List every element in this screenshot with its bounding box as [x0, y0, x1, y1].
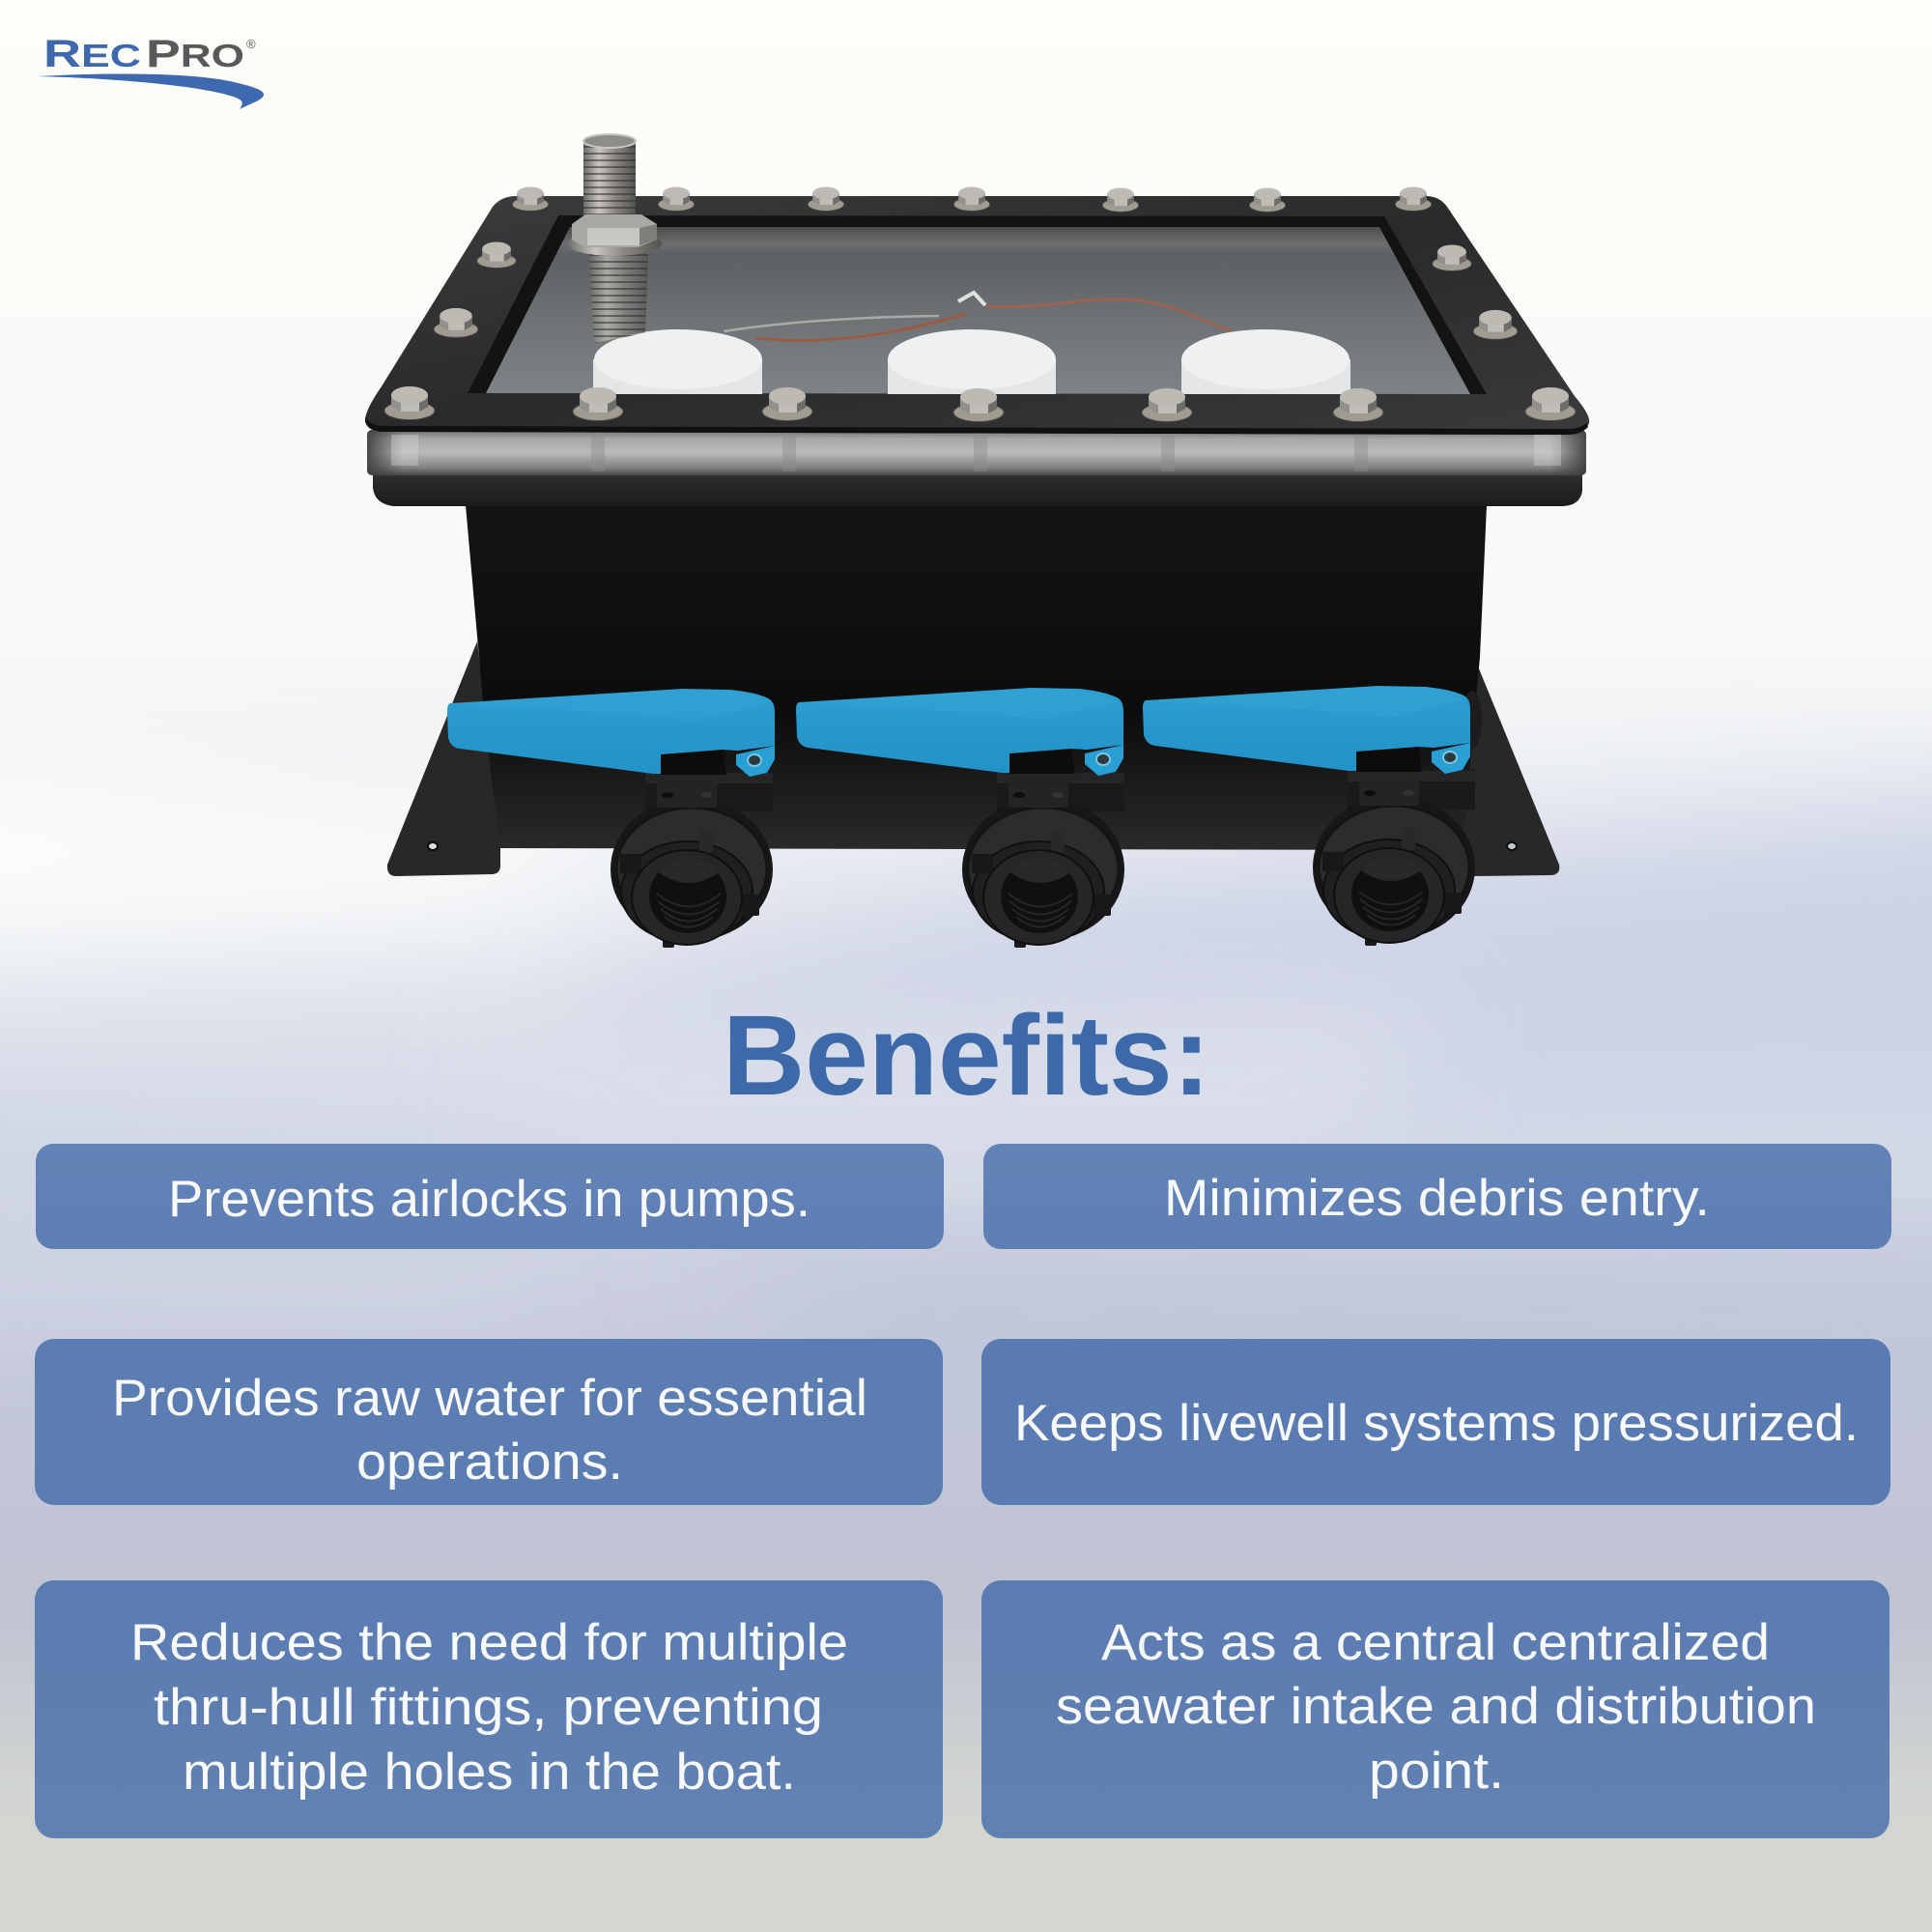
panel: central intake: Acts as a central centralized — [1101, 1614, 1770, 1671]
panel: thru-hull: multiple holes in the boat. — [183, 1744, 796, 1801]
panel: prevents airlocks — [36, 1144, 944, 1249]
lower lip — [373, 471, 1582, 506]
blue handle 3 — [1143, 686, 1470, 774]
right mounting foot — [1454, 657, 1559, 876]
panel: central intake — [981, 1580, 1889, 1838]
bolts front row — [573, 387, 1383, 421]
white cap 1 — [593, 329, 762, 394]
fitting reflection in glass — [589, 254, 648, 343]
panel: minimizes debris: Minimizes debris entry. — [1164, 1170, 1710, 1227]
logo: RecPro — [38, 33, 264, 109]
clear acrylic band — [367, 430, 1586, 475]
panel: raw water: operations. — [356, 1434, 623, 1491]
panel: prevents airlocks: Prevents airlocks in pumps. — [168, 1171, 810, 1228]
bolts left side — [384, 242, 516, 419]
cap 1 overlap — [605, 329, 678, 359]
white cap 3 — [1181, 329, 1350, 394]
product photo: seawater manifold box — [365, 134, 1589, 948]
right side port — [1463, 691, 1482, 749]
panel: livewell — [981, 1339, 1890, 1505]
panel: raw water: Provides raw water for essential — [112, 1370, 867, 1427]
logo registered mark: ® — [246, 37, 256, 51]
glass window — [486, 227, 1470, 394]
blue handle 2 — [796, 688, 1123, 776]
box body — [466, 505, 1487, 850]
panel: central intake: seawater intake and distribution — [1056, 1678, 1816, 1735]
left mounting foot — [387, 641, 500, 876]
valve 3 — [1313, 769, 1475, 946]
panel: thru-hull — [35, 1580, 943, 1838]
top frame plate — [365, 196, 1589, 435]
logo wordmark: R EC — [43, 33, 141, 75]
window slot — [468, 215, 1487, 394]
panel: thru-hull: Reduces the need for multiple — [130, 1614, 848, 1671]
steel thru-hull fitting — [567, 134, 662, 256]
white cap 2 — [888, 329, 1056, 394]
panel: minimizes debris — [983, 1144, 1891, 1249]
panel: raw water — [35, 1339, 943, 1505]
panel: thru-hull: thru-hull fittings, preventing — [154, 1679, 823, 1736]
logo wordmark second part: P RO — [146, 33, 244, 75]
plate edge — [365, 417, 1588, 435]
wires — [724, 293, 1231, 340]
bolts right side — [1433, 245, 1576, 421]
heading: Benefits: Benefits: — [723, 992, 1210, 1120]
panel: central intake: point. — [1369, 1743, 1504, 1800]
panel: livewell: Keeps livewell systems pressurized. — [1014, 1395, 1859, 1452]
valve 2 — [962, 771, 1124, 948]
bolts top row — [512, 186, 1432, 212]
logo swoosh — [38, 73, 264, 109]
blue handle 1 — [447, 689, 775, 777]
valve 1 — [611, 771, 773, 948]
